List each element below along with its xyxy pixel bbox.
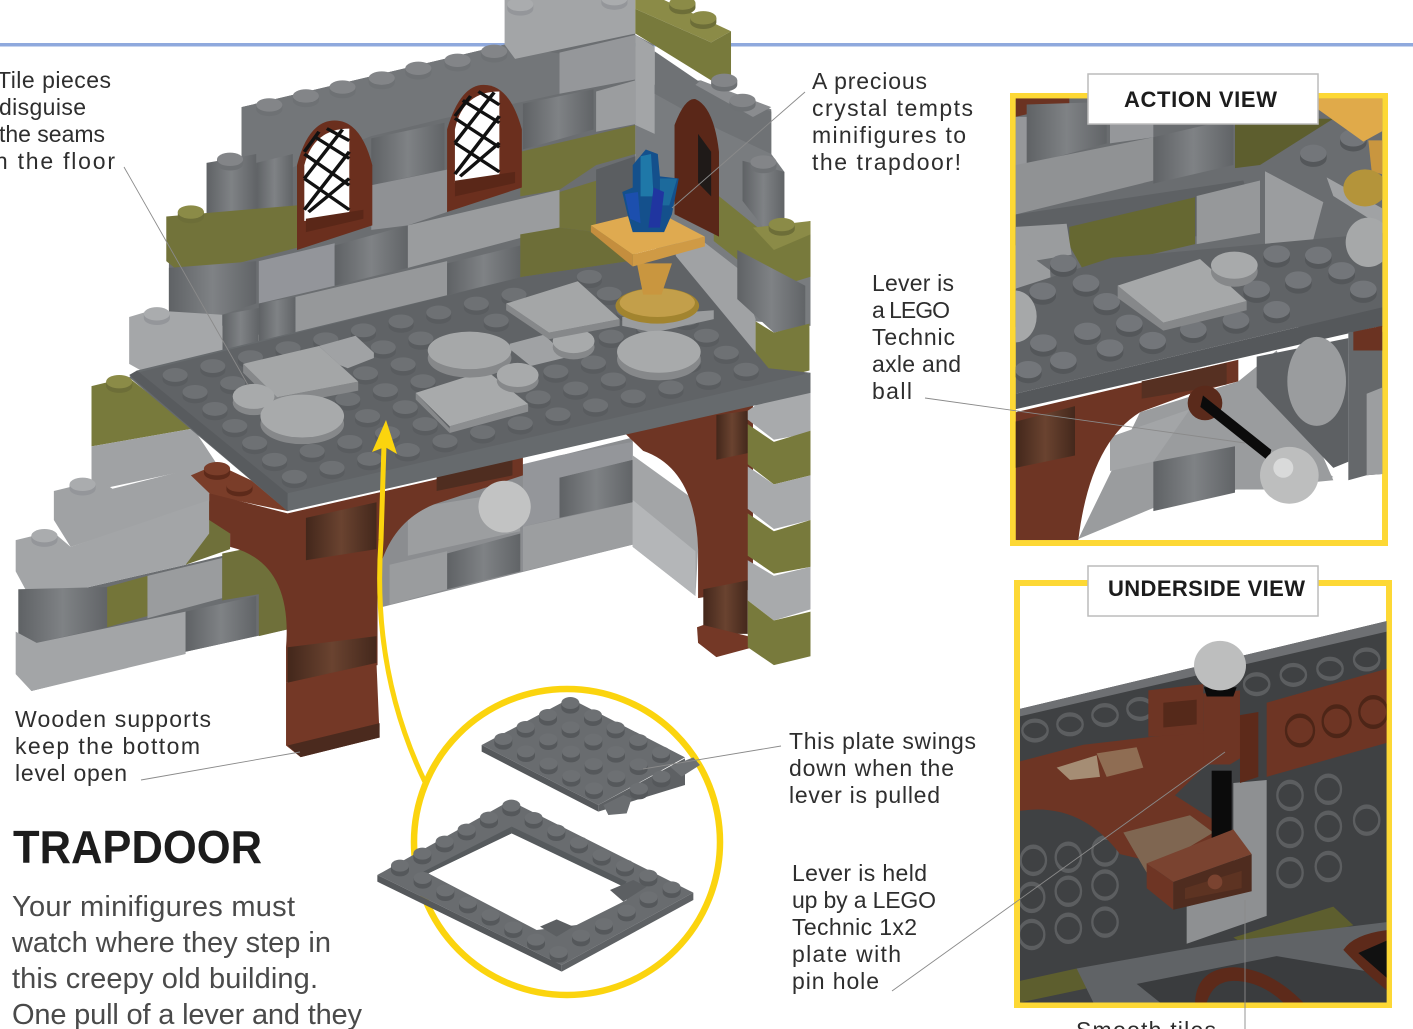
panel: action view — [993, 74, 1391, 543]
main illustration: castle wall with trapdoor floor — [16, 0, 810, 757]
top wall studs — [178, 45, 507, 223]
action view label — [1088, 74, 1318, 124]
label: crystal — [812, 68, 973, 175]
label: lever: axle and — [872, 351, 961, 377]
label: lever hold — [792, 860, 936, 994]
action view label: ACTION VIEW — [1124, 87, 1277, 112]
arrow: yellow arrow to floor — [372, 420, 425, 782]
label: lever: ball — [872, 378, 912, 404]
label: lever: Lever is — [872, 270, 954, 296]
label: tile pieces: Tile pieces — [0, 67, 111, 93]
line to swing plate — [643, 746, 781, 769]
body text: Your minifigures must — [12, 891, 295, 923]
right wall — [635, 35, 810, 379]
label: swinging plate — [789, 728, 976, 808]
swinging trapdoor plate — [482, 697, 700, 815]
label: lever hold: Lever is held — [792, 860, 927, 886]
left wooden support — [191, 455, 523, 757]
header rule — [0, 43, 1413, 46]
panel: underside view — [1017, 566, 1389, 1005]
pedestal — [591, 210, 705, 324]
body text: this creepy old building. — [12, 963, 318, 995]
body text — [11, 891, 362, 1029]
icon: left window with lattice — [297, 121, 372, 250]
leader line: lever — [925, 398, 1245, 443]
label: lever hold: pin hole — [792, 968, 879, 994]
label: tile pieces: the seams — [0, 121, 105, 147]
label: lever: a LEGO — [872, 297, 950, 323]
icon: middle window with lattice — [447, 85, 522, 212]
label: swinging plate: lever is pulled — [789, 782, 940, 808]
action view frame — [1013, 96, 1385, 543]
body text: watch where they step in — [11, 927, 331, 959]
underside view label: UNDERSIDE VIEW — [1108, 576, 1305, 601]
label: lever hold: Technic 1x2 — [792, 914, 917, 940]
underside scene — [1019, 621, 1387, 1002]
icon: right side window — [675, 99, 719, 237]
action view scene — [993, 98, 1391, 540]
yellow circle: trapdoor detail — [414, 689, 720, 995]
label: swinging plate: This plate swings — [789, 728, 976, 754]
right wooden support — [622, 402, 753, 657]
trapdoor frame plate — [377, 800, 693, 972]
label: crystal: crystal tempts — [812, 95, 973, 121]
label: lever: Technic — [872, 324, 955, 350]
icon: blue crystal — [622, 150, 679, 232]
lever ball, pulled side — [478, 481, 531, 533]
label: wooden supports — [15, 706, 211, 786]
underside view frame — [1017, 583, 1389, 1005]
title: TRAPDOOR — [13, 821, 262, 873]
leader lines — [124, 92, 805, 780]
label: tile pieces: disguise — [0, 94, 86, 120]
label: crystal: minifigures to — [812, 122, 966, 148]
label: lever — [872, 270, 961, 404]
underside view label — [1088, 566, 1318, 616]
leader lines: underside — [892, 752, 1245, 1029]
label: lever hold: up by a LEGO — [792, 887, 936, 913]
label: lever hold: plate with — [792, 941, 901, 967]
back wall — [166, 0, 731, 357]
label: wooden supports: Wooden supports — [15, 706, 211, 732]
floor tiles — [233, 281, 714, 444]
label: tile pieces — [0, 67, 115, 174]
lower back wall — [382, 437, 701, 607]
label: wooden supports: level open — [15, 760, 127, 786]
label: swinging plate: down when the — [789, 755, 954, 781]
floor plate with studs — [129, 254, 810, 511]
label: crystal: the trapdoor! — [812, 149, 961, 175]
lower left stepped wall — [16, 307, 288, 691]
label: wooden supports: keep the bottom — [15, 733, 200, 759]
label: crystal: A precious — [812, 68, 927, 94]
right stacked column — [748, 386, 810, 665]
